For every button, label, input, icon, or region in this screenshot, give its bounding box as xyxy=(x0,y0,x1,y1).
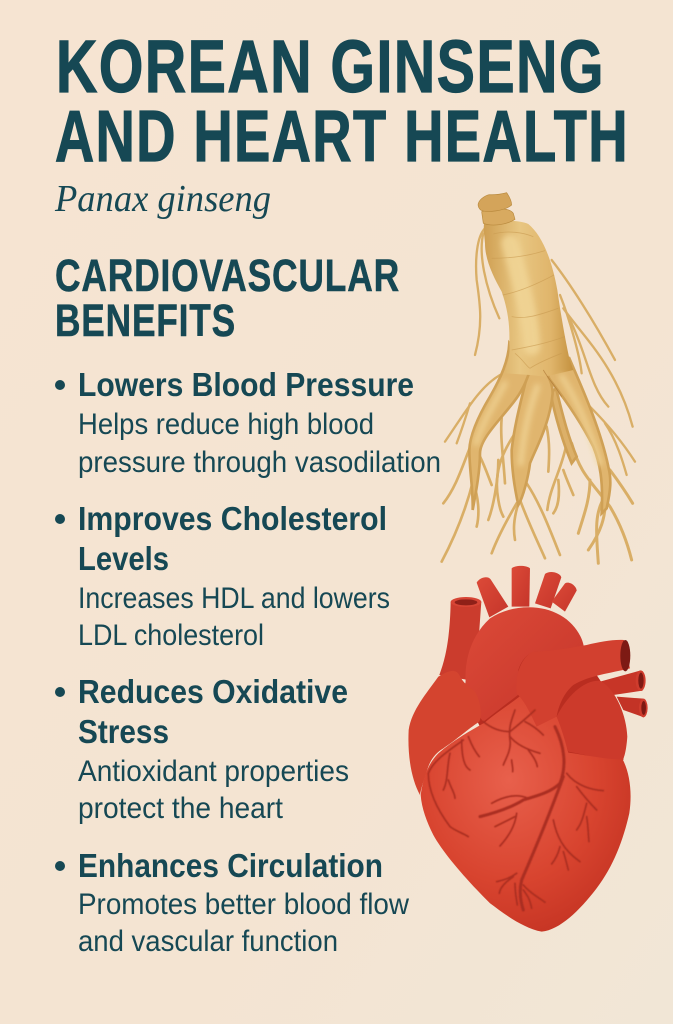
benefit: improves cholesterol levels: Increases HDL and lowers xyxy=(78,582,390,615)
vessel: aortic arch xyxy=(466,607,584,722)
benefit: lowers blood pressure: Lowers Blood Pressure xyxy=(78,366,414,403)
benefit: reduces oxidative stress: Antioxidant properties xyxy=(78,755,349,788)
benefit: reduces oxidative stress: Stress xyxy=(78,713,169,750)
benefit: lowers blood pressure: Helps reduce high blood xyxy=(78,408,374,441)
benefit: reduces oxidative stress xyxy=(55,673,349,825)
vessel: pulmonary trunk xyxy=(516,640,630,727)
section heading xyxy=(55,250,400,346)
benefit: lowers blood pressure: pressure through vasodilation xyxy=(78,446,441,479)
illustration: anatomical heart xyxy=(408,566,648,932)
chamber: ventricles xyxy=(421,687,631,932)
vessel: superior vena cava xyxy=(439,597,481,680)
benefit: enhances circulation: and vascular function xyxy=(78,925,338,958)
benefit: improves cholesterol levels xyxy=(55,500,390,652)
subtitle: Latin name: Panax ginseng xyxy=(54,178,271,220)
section heading: CARDIOVASCULAR xyxy=(55,250,400,301)
coronary vessels xyxy=(428,710,603,910)
benefit: reduces oxidative stress: Reduces Oxidative xyxy=(78,673,348,710)
benefit: improves cholesterol levels: Levels xyxy=(78,540,169,577)
section heading: BENEFITS xyxy=(55,295,236,346)
root body and legs xyxy=(469,221,610,513)
vessel: top arch branches xyxy=(477,566,577,617)
vessel: pulmonary veins xyxy=(600,670,648,717)
title xyxy=(55,25,629,177)
heart base silhouette xyxy=(463,627,627,773)
benefit: enhances circulation: Enhances Circulation xyxy=(78,847,383,884)
benefit: reduces oxidative stress: protect the heart xyxy=(78,792,284,825)
benefit: enhances circulation: Promotes better blood flow xyxy=(78,888,409,921)
chamber: right atrium xyxy=(408,671,481,795)
pulmonary trunk opening xyxy=(620,640,630,671)
benefit: improves cholesterol levels: Improves Cholesterol xyxy=(78,500,387,537)
chamber: left atrium xyxy=(557,681,627,761)
benefit: enhances circulation xyxy=(55,847,409,958)
benefit: improves cholesterol levels: LDL cholesterol xyxy=(78,619,264,652)
benefit: lowers blood pressure xyxy=(55,366,441,479)
illustration: ginseng root xyxy=(442,193,635,563)
